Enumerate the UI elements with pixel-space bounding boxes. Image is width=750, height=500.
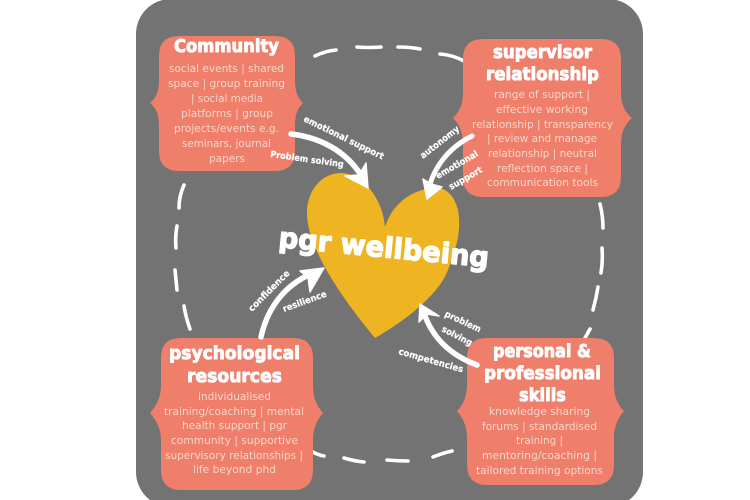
personal body text: tailored training options bbox=[476, 465, 603, 477]
psychological body text: health support | pgr bbox=[182, 420, 288, 432]
supervisor body text bbox=[472, 89, 613, 189]
community body text: | social media bbox=[191, 93, 263, 105]
supervisor heading: supervisor bbox=[493, 42, 592, 63]
community body text bbox=[168, 63, 285, 165]
label: confidence: confidence bbox=[247, 269, 292, 314]
label: support: support bbox=[448, 165, 485, 193]
personal body text: knowledge sharing bbox=[489, 406, 590, 418]
community body text: papers bbox=[209, 153, 245, 165]
arrow: community to heart bbox=[291, 134, 368, 188]
community body text: seminars, journal bbox=[182, 138, 271, 150]
label: competencies: competencies bbox=[397, 347, 464, 375]
panel: psychological resources bbox=[150, 338, 323, 490]
supervisor heading bbox=[486, 42, 599, 85]
psychological heading: resources bbox=[187, 366, 282, 387]
label: emotional support: emotional support bbox=[302, 115, 386, 163]
supervisor heading: relationship bbox=[486, 64, 599, 85]
personal body text bbox=[476, 406, 603, 477]
psychological body text: supervisory relationships | bbox=[165, 450, 303, 462]
personal heading: professional bbox=[484, 363, 601, 384]
psychological body text: individualised bbox=[198, 391, 271, 403]
psychological heading bbox=[169, 343, 300, 387]
psychological body text: training/coaching | mental bbox=[164, 406, 304, 418]
personal body text: forums | standardised bbox=[482, 421, 597, 433]
heart bbox=[307, 173, 459, 338]
psychological body text bbox=[164, 391, 304, 476]
community box bbox=[150, 36, 303, 171]
community body text: projects/events e.g. bbox=[174, 123, 279, 135]
label: resilience: resilience bbox=[282, 290, 328, 315]
personal box bbox=[457, 338, 624, 485]
arrow: personal to heart bbox=[419, 304, 477, 365]
community body text: social events | shared bbox=[169, 63, 284, 75]
supervisor body text: range of support | bbox=[494, 89, 590, 101]
community heading: Community bbox=[174, 36, 279, 57]
supervisor body text: | review and manage bbox=[487, 133, 597, 145]
supervisor box bbox=[453, 39, 632, 197]
label: autonomy: autonomy bbox=[419, 124, 462, 161]
label: solving: solving bbox=[440, 325, 474, 349]
background panel bbox=[136, 0, 643, 500]
psychological heading: psychological bbox=[169, 343, 300, 364]
personal heading: personal & bbox=[493, 341, 591, 362]
supervisor body text: effective working bbox=[496, 104, 588, 116]
supervisor body text: relationship | transparency bbox=[472, 119, 613, 131]
personal heading: skills bbox=[519, 385, 566, 406]
label: problem: problem bbox=[443, 310, 482, 335]
supervisor body text: communication tools bbox=[487, 177, 598, 189]
psychological box bbox=[150, 338, 323, 490]
panel: supervisor relationship bbox=[453, 39, 632, 197]
supervisor body text: relationship | neutral bbox=[488, 148, 597, 160]
community body text: space | group training bbox=[168, 78, 285, 90]
personal body text: mentoring/coaching | bbox=[482, 450, 597, 462]
psychological body text: community | supportive bbox=[171, 435, 298, 447]
dashed loop bbox=[175, 47, 603, 462]
personal body text: training | bbox=[516, 435, 563, 447]
panel: personal and professional skills bbox=[457, 338, 624, 485]
arrow: psychological to heart bbox=[261, 268, 324, 337]
supervisor body text: reflection space | bbox=[497, 163, 588, 175]
community body text: platforms | group bbox=[181, 108, 273, 120]
title: pgr wellbeing: pgr wellbeing bbox=[277, 221, 491, 274]
psychological body text: life beyond phd bbox=[193, 464, 276, 476]
panel: community bbox=[150, 36, 303, 171]
arrow: supervisor to heart bbox=[423, 136, 472, 199]
label: problem solving: Problem solving bbox=[270, 150, 344, 170]
label: emotional: emotional bbox=[434, 149, 480, 182]
personal heading bbox=[484, 341, 601, 406]
